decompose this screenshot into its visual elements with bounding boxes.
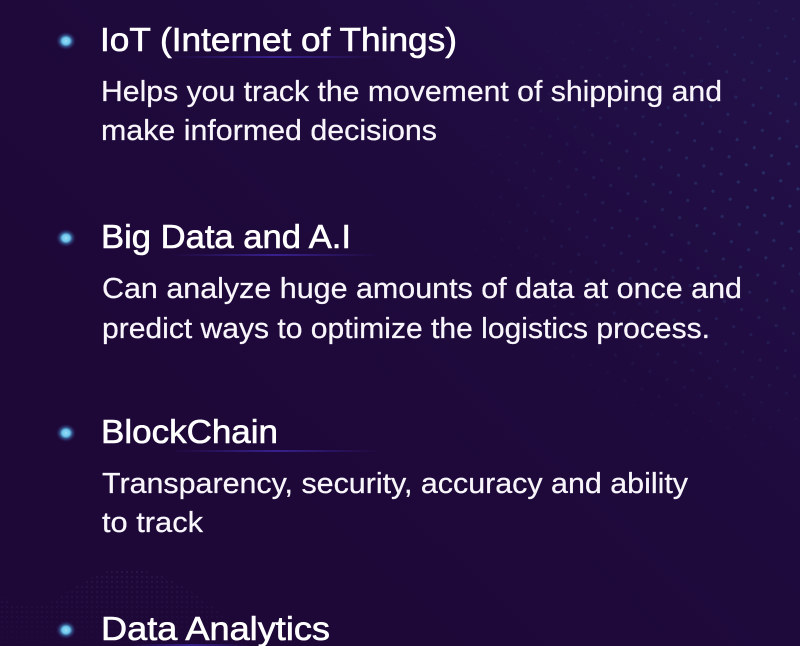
bullet xyxy=(56,229,76,247)
underline glow xyxy=(170,56,380,58)
description: to track xyxy=(102,507,204,539)
description: predict ways to optimize the logistics process. xyxy=(102,313,710,345)
heading: BlockChain xyxy=(101,413,278,450)
description: Transparency, security, accuracy and ability xyxy=(102,468,689,500)
item: BlockChain xyxy=(56,413,689,539)
description xyxy=(102,273,742,345)
heading: Data Analytics xyxy=(101,610,330,646)
heading: IoT (Internet of Things) xyxy=(100,21,457,58)
bullet xyxy=(56,424,76,442)
underline glow xyxy=(170,450,380,452)
item: Data Analytics xyxy=(56,610,330,646)
dotted texture, upper right xyxy=(526,2,800,396)
item: Big Data and A.I xyxy=(56,218,742,345)
dotted wave, lower left xyxy=(1,571,232,628)
description xyxy=(101,76,722,147)
description xyxy=(102,468,689,539)
description: Can analyze huge amounts of data at once and xyxy=(102,273,742,305)
underline glow xyxy=(130,644,250,646)
bullet xyxy=(56,621,76,639)
item: IoT xyxy=(56,21,722,147)
underline glow xyxy=(170,254,380,256)
bullet xyxy=(56,32,76,50)
heading: Big Data and A.I xyxy=(101,218,351,255)
description: Helps you track the movement of shipping and xyxy=(101,76,722,108)
description: make informed decisions xyxy=(101,115,437,147)
